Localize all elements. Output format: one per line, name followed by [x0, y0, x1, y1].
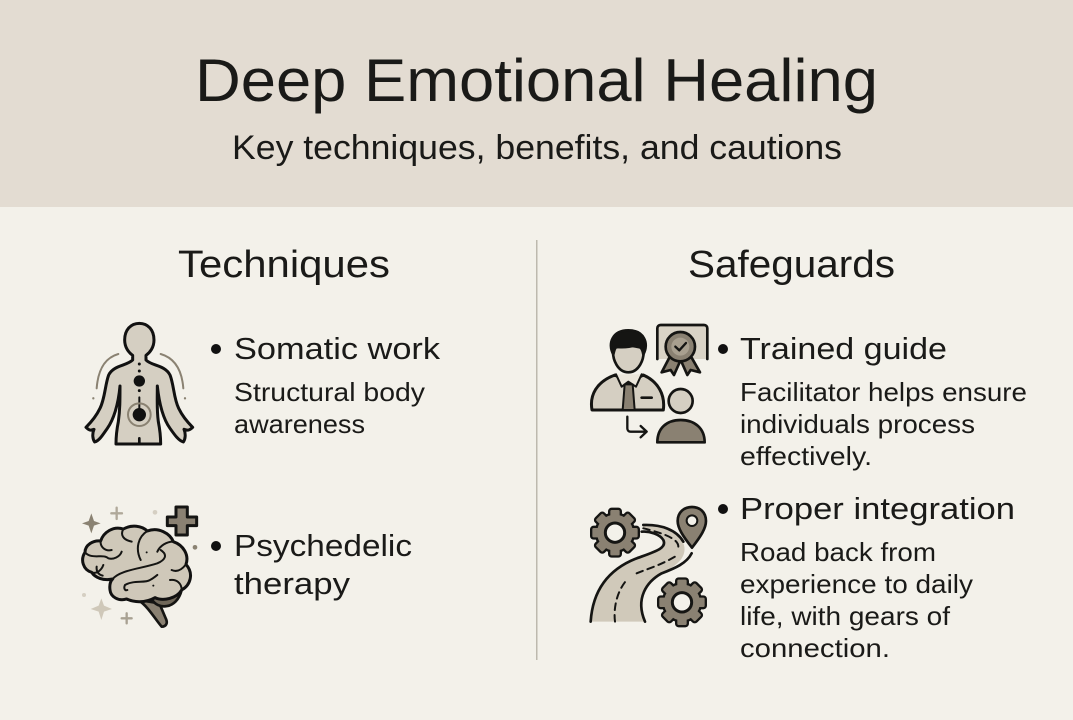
- subtitle: Key techniques, benefits, and cautions: [232, 129, 842, 167]
- item: somatic work: awareness: [234, 409, 365, 439]
- item: trained guide: effectively.: [740, 441, 872, 471]
- item: proper integration: Road back from: [740, 537, 936, 567]
- icon: body with energy points: [86, 323, 193, 444]
- item: proper integration: [718, 491, 1015, 663]
- item: somatic work: [211, 331, 441, 439]
- item: somatic work: Structural body: [234, 377, 425, 407]
- heading: techniques: Techniques: [178, 244, 390, 286]
- column divider: [536, 240, 538, 660]
- header band: [0, 0, 1073, 207]
- item: trained guide: individuals process: [740, 409, 975, 439]
- icon: brain with plus and sparkles: [82, 507, 197, 627]
- item: psychedelic therapy: therapy: [234, 566, 351, 601]
- panel: techniques: [82, 244, 441, 627]
- item: proper integration: life, with gears of: [740, 601, 951, 631]
- icon: winding road with gears and pin: [591, 507, 706, 625]
- item: psychedelic therapy: Psychedelic: [234, 528, 412, 563]
- item: trained guide: Trained guide: [740, 331, 947, 366]
- item: proper integration: Proper integration: [740, 491, 1015, 526]
- item: proper integration: experience to daily: [740, 569, 973, 599]
- heading: safeguards: Safeguards: [688, 244, 895, 286]
- icon: trained guide with certificate: [591, 325, 707, 442]
- item: trained guide: [718, 331, 1027, 471]
- title: Deep Emotional Healing: [195, 47, 878, 114]
- item: proper integration: connection.: [740, 633, 890, 663]
- item: somatic work: Somatic work: [234, 331, 441, 366]
- panel: safeguards: [591, 244, 1027, 663]
- item: psychedelic therapy: [211, 528, 412, 601]
- item: trained guide: Facilitator helps ensure: [740, 377, 1027, 407]
